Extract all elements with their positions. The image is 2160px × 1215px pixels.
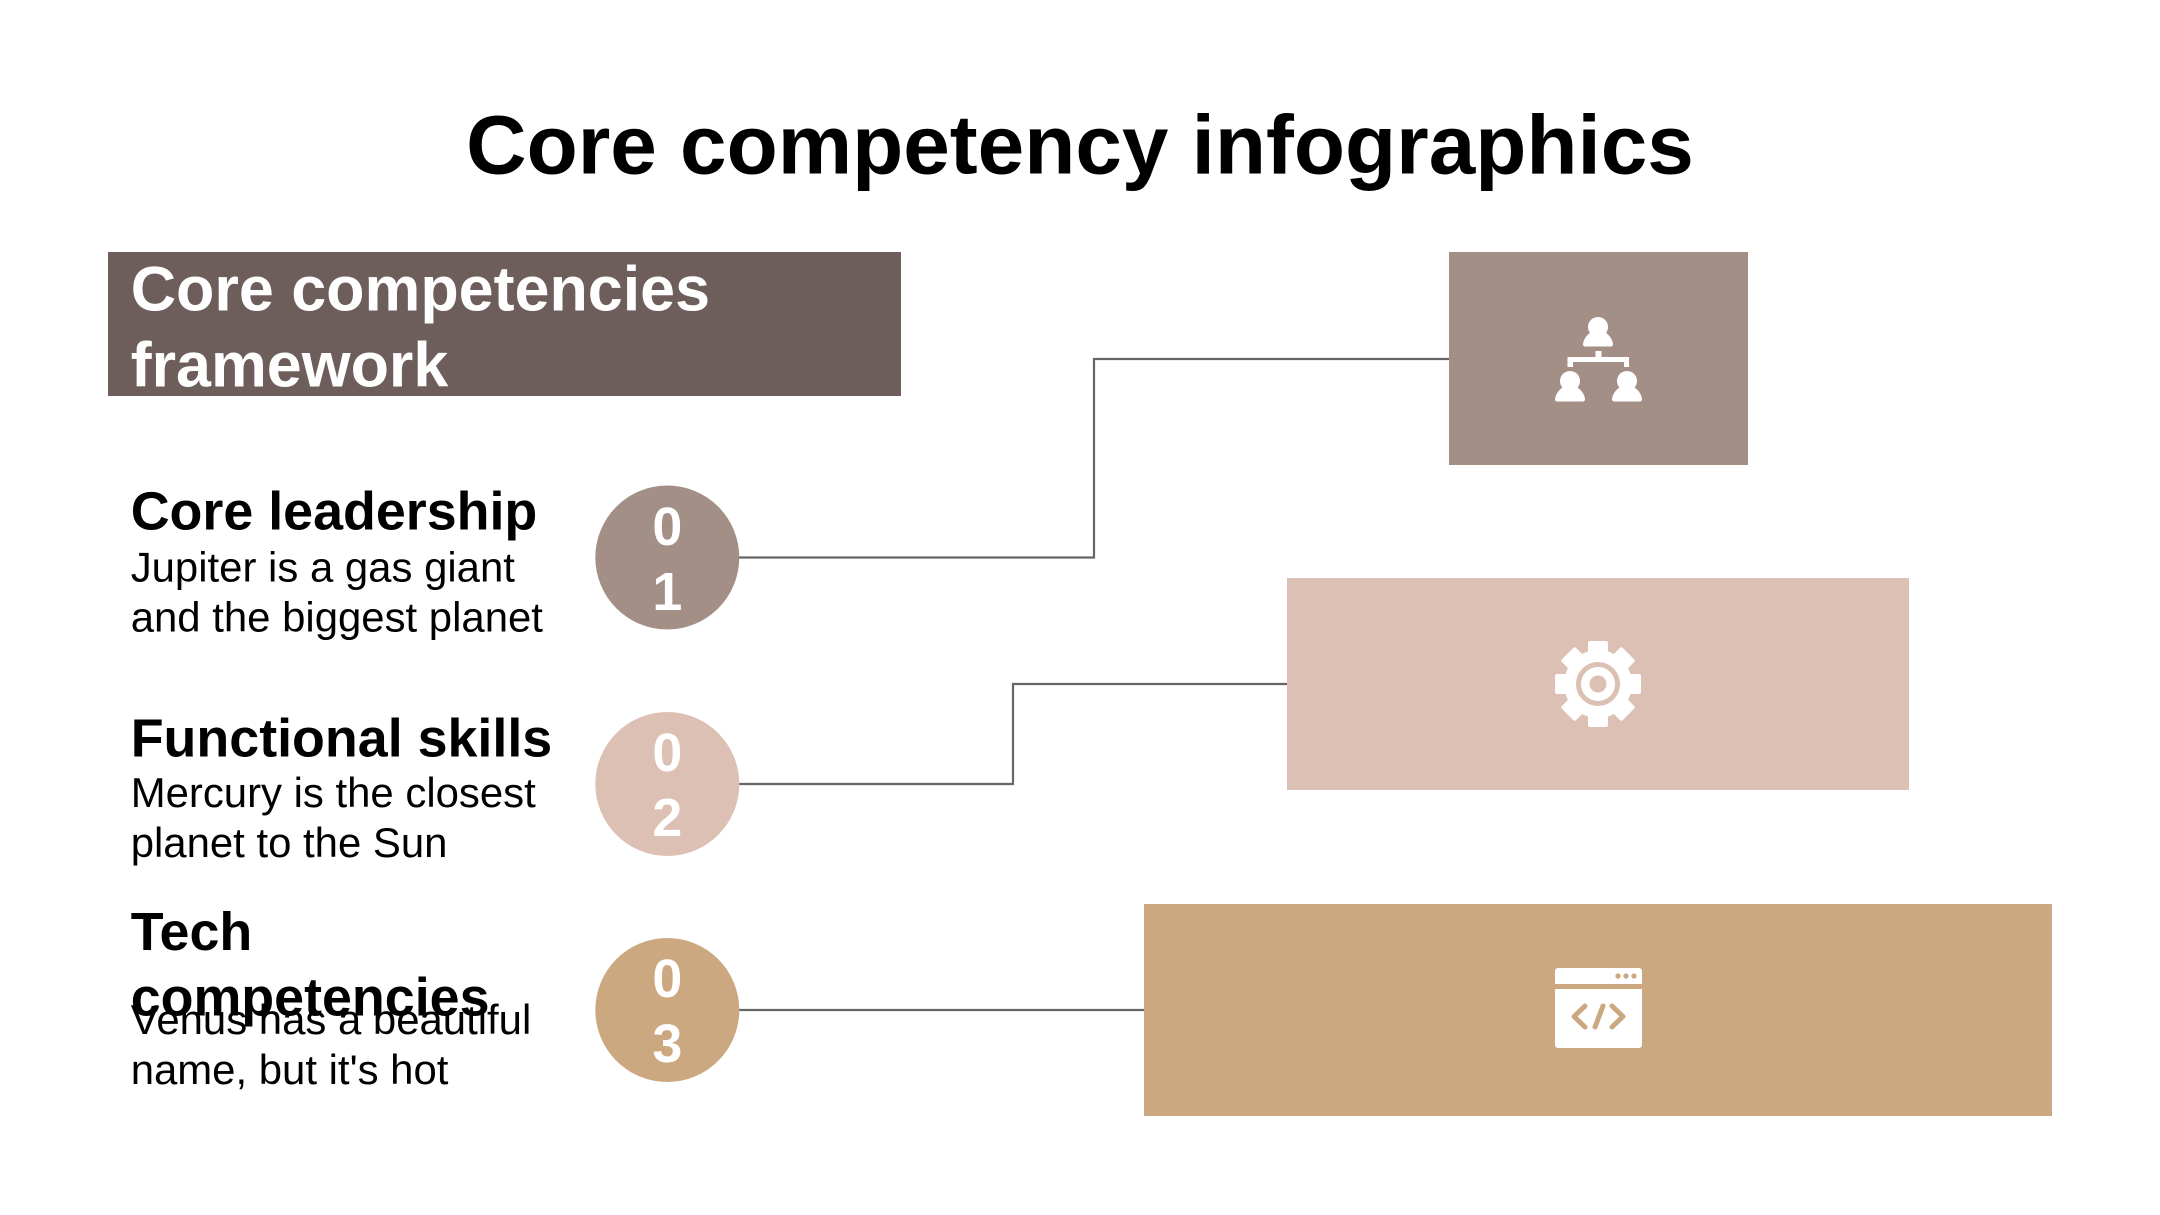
number badge 02 [595,712,739,856]
heading: Core leadership [131,482,537,542]
connector: 02 [739,684,1287,784]
number badge 01: 1 [652,562,682,622]
panel: tech competencies text [131,902,531,1093]
connector: 03 [739,1009,1144,1011]
description: Mercury is the closest [131,769,536,816]
description: Jupiter is a gas giant [131,544,515,590]
panel: tech bar [1144,904,2052,1116]
panel: framework heading [108,252,901,400]
title: Core competency infographics [466,98,1694,192]
description: and the biggest planet [131,594,543,640]
panel: core leadership text [131,482,543,640]
number badge 01 [595,486,739,630]
description: name, but it's hot [131,1046,449,1093]
heading: Tech [131,902,252,962]
heading: Functional skills [131,708,552,768]
icon: code window [1555,968,1642,1048]
icon: organisation hierarchy [1555,317,1642,402]
description: Venus has a beautiful [131,996,531,1043]
number badge 03 [595,938,739,1082]
heading text: framework [131,330,448,400]
panel: skills bar [1287,578,1909,790]
panel: leadership bar [1449,252,1748,465]
description: planet to the Sun [131,819,447,866]
number badge 01: 0 [652,497,682,557]
number badge 02: 2 [652,788,682,848]
heading text: Core competencies [131,254,710,324]
number badge 03: 0 [652,949,682,1009]
number badge 02: 0 [652,723,682,783]
icon: gear [1555,641,1641,727]
panel: functional skills text [131,708,552,866]
heading: competencies [131,968,489,1028]
connector: 01 [739,359,1449,558]
number badge 03: 3 [652,1014,682,1074]
